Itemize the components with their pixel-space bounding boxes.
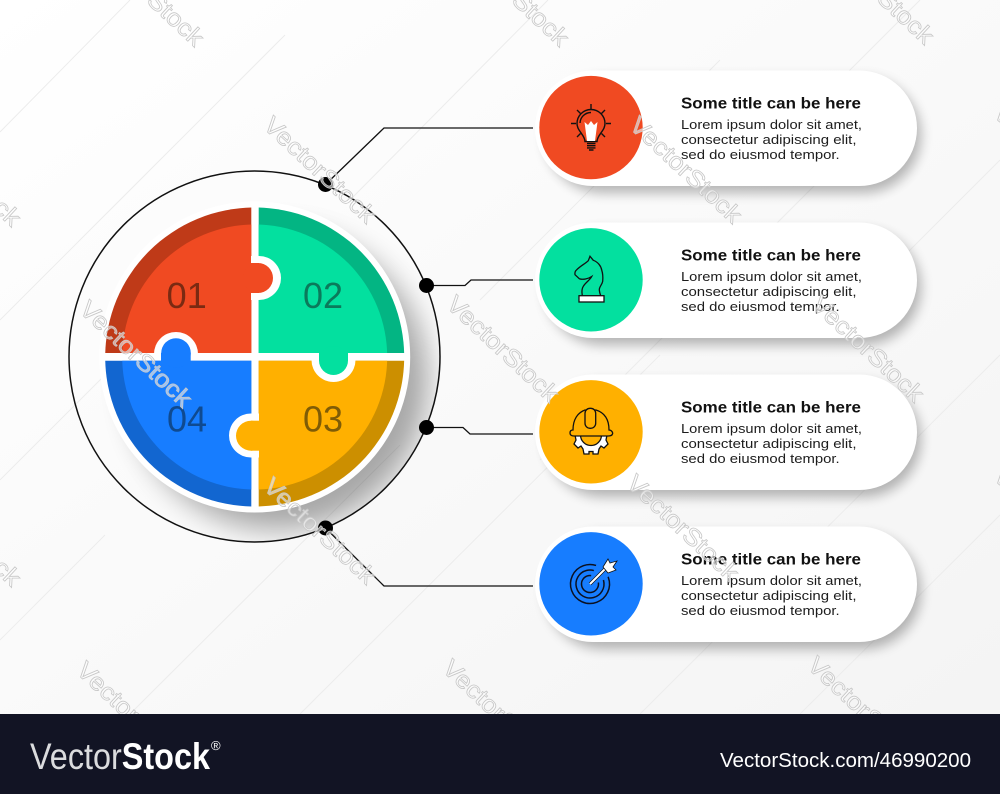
number 01: 01 — [167, 275, 207, 316]
registered mark: ® — [211, 738, 221, 753]
watermarks: VectorStock — [441, 291, 565, 409]
white disc — [99, 202, 410, 512]
tab red into green — [243, 256, 281, 300]
description: sed do eiusmod tempor. — [681, 299, 840, 314]
description: consectetur adipiscing elit, — [681, 588, 856, 603]
footer logo: VectorStock — [30, 736, 210, 777]
pill shadow — [545, 534, 921, 649]
connector dots — [318, 177, 434, 536]
pill — [535, 526, 917, 642]
description — [681, 117, 862, 162]
icon: light bulb — [571, 104, 611, 150]
description — [681, 421, 862, 466]
description: consectetur adipiscing elit, — [681, 132, 856, 147]
footer bar — [0, 714, 1000, 794]
watermarks: VectorStock — [71, 657, 195, 775]
icon: chess knight — [575, 256, 604, 302]
number 04: 04 — [167, 399, 207, 440]
pill shadow — [545, 382, 921, 497]
piece 04 blue — [105, 360, 252, 506]
description: sed do eiusmod tempor. — [681, 603, 840, 618]
card 3 — [535, 374, 921, 497]
description: consectetur adipiscing elit, — [681, 284, 856, 299]
outer ring — [69, 171, 440, 542]
description: Lorem ipsum dolor sit amet, — [681, 573, 862, 588]
icon: hard hat with gear — [570, 408, 613, 454]
watermarks: VectorStock — [258, 112, 382, 230]
description: sed do eiusmod tempor. — [681, 451, 840, 466]
number 03: 03 — [303, 399, 343, 440]
watermarks: VectorStock — [802, 652, 926, 770]
number 02: 02 — [303, 275, 343, 316]
description: Lorem ipsum dolor sit amet, — [681, 117, 862, 132]
card 2 — [535, 222, 921, 345]
icon circle — [539, 228, 643, 332]
connector lines — [326, 128, 533, 586]
tab blue into red — [154, 332, 198, 368]
description: Lorem ipsum dolor sit amet, — [681, 269, 862, 284]
watermarks: VectorStock — [621, 470, 745, 588]
title: Some title can be here — [681, 247, 861, 264]
watermarks: VectorStock — [437, 655, 561, 773]
tab yellow into blue — [229, 414, 266, 458]
icon circle — [539, 76, 643, 179]
description — [681, 269, 862, 314]
icon circle — [539, 380, 643, 483]
card 1 — [535, 70, 921, 193]
piece 01 red — [105, 208, 252, 353]
description: sed do eiusmod tempor. — [681, 147, 840, 162]
description: Lorem ipsum dolor sit amet, — [681, 421, 862, 436]
puzzle circle diagram — [69, 171, 440, 542]
watermarks: VectorStock — [624, 112, 748, 230]
pill shadow — [545, 230, 921, 345]
title: Some title can be here — [681, 399, 861, 416]
pill — [535, 70, 917, 186]
description: consectetur adipiscing elit, — [681, 436, 856, 451]
piece 03 yellow — [258, 360, 404, 506]
description — [681, 573, 862, 618]
tab green into yellow — [312, 346, 356, 382]
icon: target with arrow — [565, 559, 617, 609]
card 4 — [535, 526, 921, 649]
pill — [535, 374, 917, 490]
watermarks: VectorStock — [74, 296, 198, 414]
watermarks: VectorStock — [806, 291, 930, 409]
pill shadow — [545, 78, 921, 193]
icon circle — [539, 532, 643, 636]
pill — [535, 222, 917, 338]
title: Some title can be here — [681, 95, 861, 112]
title: Some title can be here — [681, 551, 861, 568]
watermarks: VectorStock — [258, 473, 382, 591]
footer url: VectorStock.com/46990200 — [720, 750, 971, 772]
disc shadow — [128, 230, 428, 530]
piece 02 green — [258, 208, 404, 353]
